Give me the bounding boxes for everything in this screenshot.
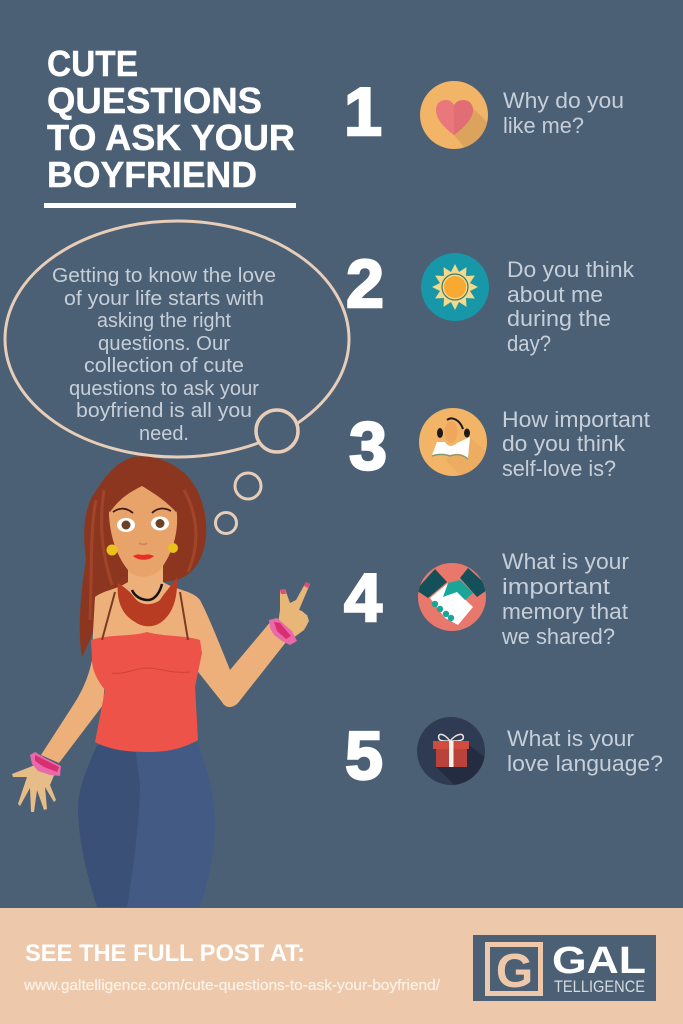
woman character [12,456,310,907]
item 4: 4 [344,560,382,636]
footer heading: SEE THE FULL POST AT: [25,940,305,967]
logo: G [496,945,533,998]
thought bubble: collection of cute [84,355,244,377]
item 2: Do you think [507,257,635,282]
item 2: 2 [346,246,384,322]
thought bubble: questions to ask your [69,378,259,400]
thought bubble: asking the right [97,310,231,332]
item 5: 5 [345,718,383,794]
item 1: like me? [503,113,584,138]
logo: TELLIGENCE [554,977,645,996]
thought bubble: need. [139,423,189,445]
item 4: we shared? [501,624,615,649]
item 2: day? [507,331,551,356]
item 3: 3 [349,408,387,484]
item 1 [347,81,622,149]
thought bubble: boyfriend is all you [76,400,252,422]
item 3: do you think [502,431,626,456]
item 5 [346,717,662,785]
icon: heart [420,81,488,149]
thought bubble: of your life starts with [64,288,264,310]
icon: handshake [416,563,490,631]
title [44,43,296,208]
icon: reading person [419,408,487,476]
item 4: What is your [502,549,629,574]
item 4: important [502,574,610,599]
thought bubble: Getting to know the love [52,265,276,287]
title: TO ASK YOUR [47,117,295,158]
item 4: memory that [502,599,628,624]
item 5: love language? [507,751,663,776]
item 2: about me [507,282,603,307]
thought bubble [5,221,349,534]
footer url: www.galtelligence.com/cute-questions-to-ask-your-boyfriend/ [23,977,441,994]
item 1: 1 [344,74,382,150]
title: BOYFRIEND [47,154,257,195]
footer band [0,908,683,1024]
item 2 [346,246,635,356]
item 3: How important [502,407,650,432]
thought bubble: questions. Our [98,333,230,355]
item 4 [344,549,629,649]
icon: gift [417,717,485,785]
logo [473,935,656,1001]
title: CUTE [47,43,138,84]
item 3: self-love is? [502,456,616,481]
item 1: Why do you [503,88,624,113]
title: QUESTIONS [47,80,262,121]
icon: sun [421,253,489,321]
item 2: during the [507,306,611,331]
item 5: What is your [507,726,634,751]
item 3 [349,408,650,476]
logo: GAL [552,940,646,982]
